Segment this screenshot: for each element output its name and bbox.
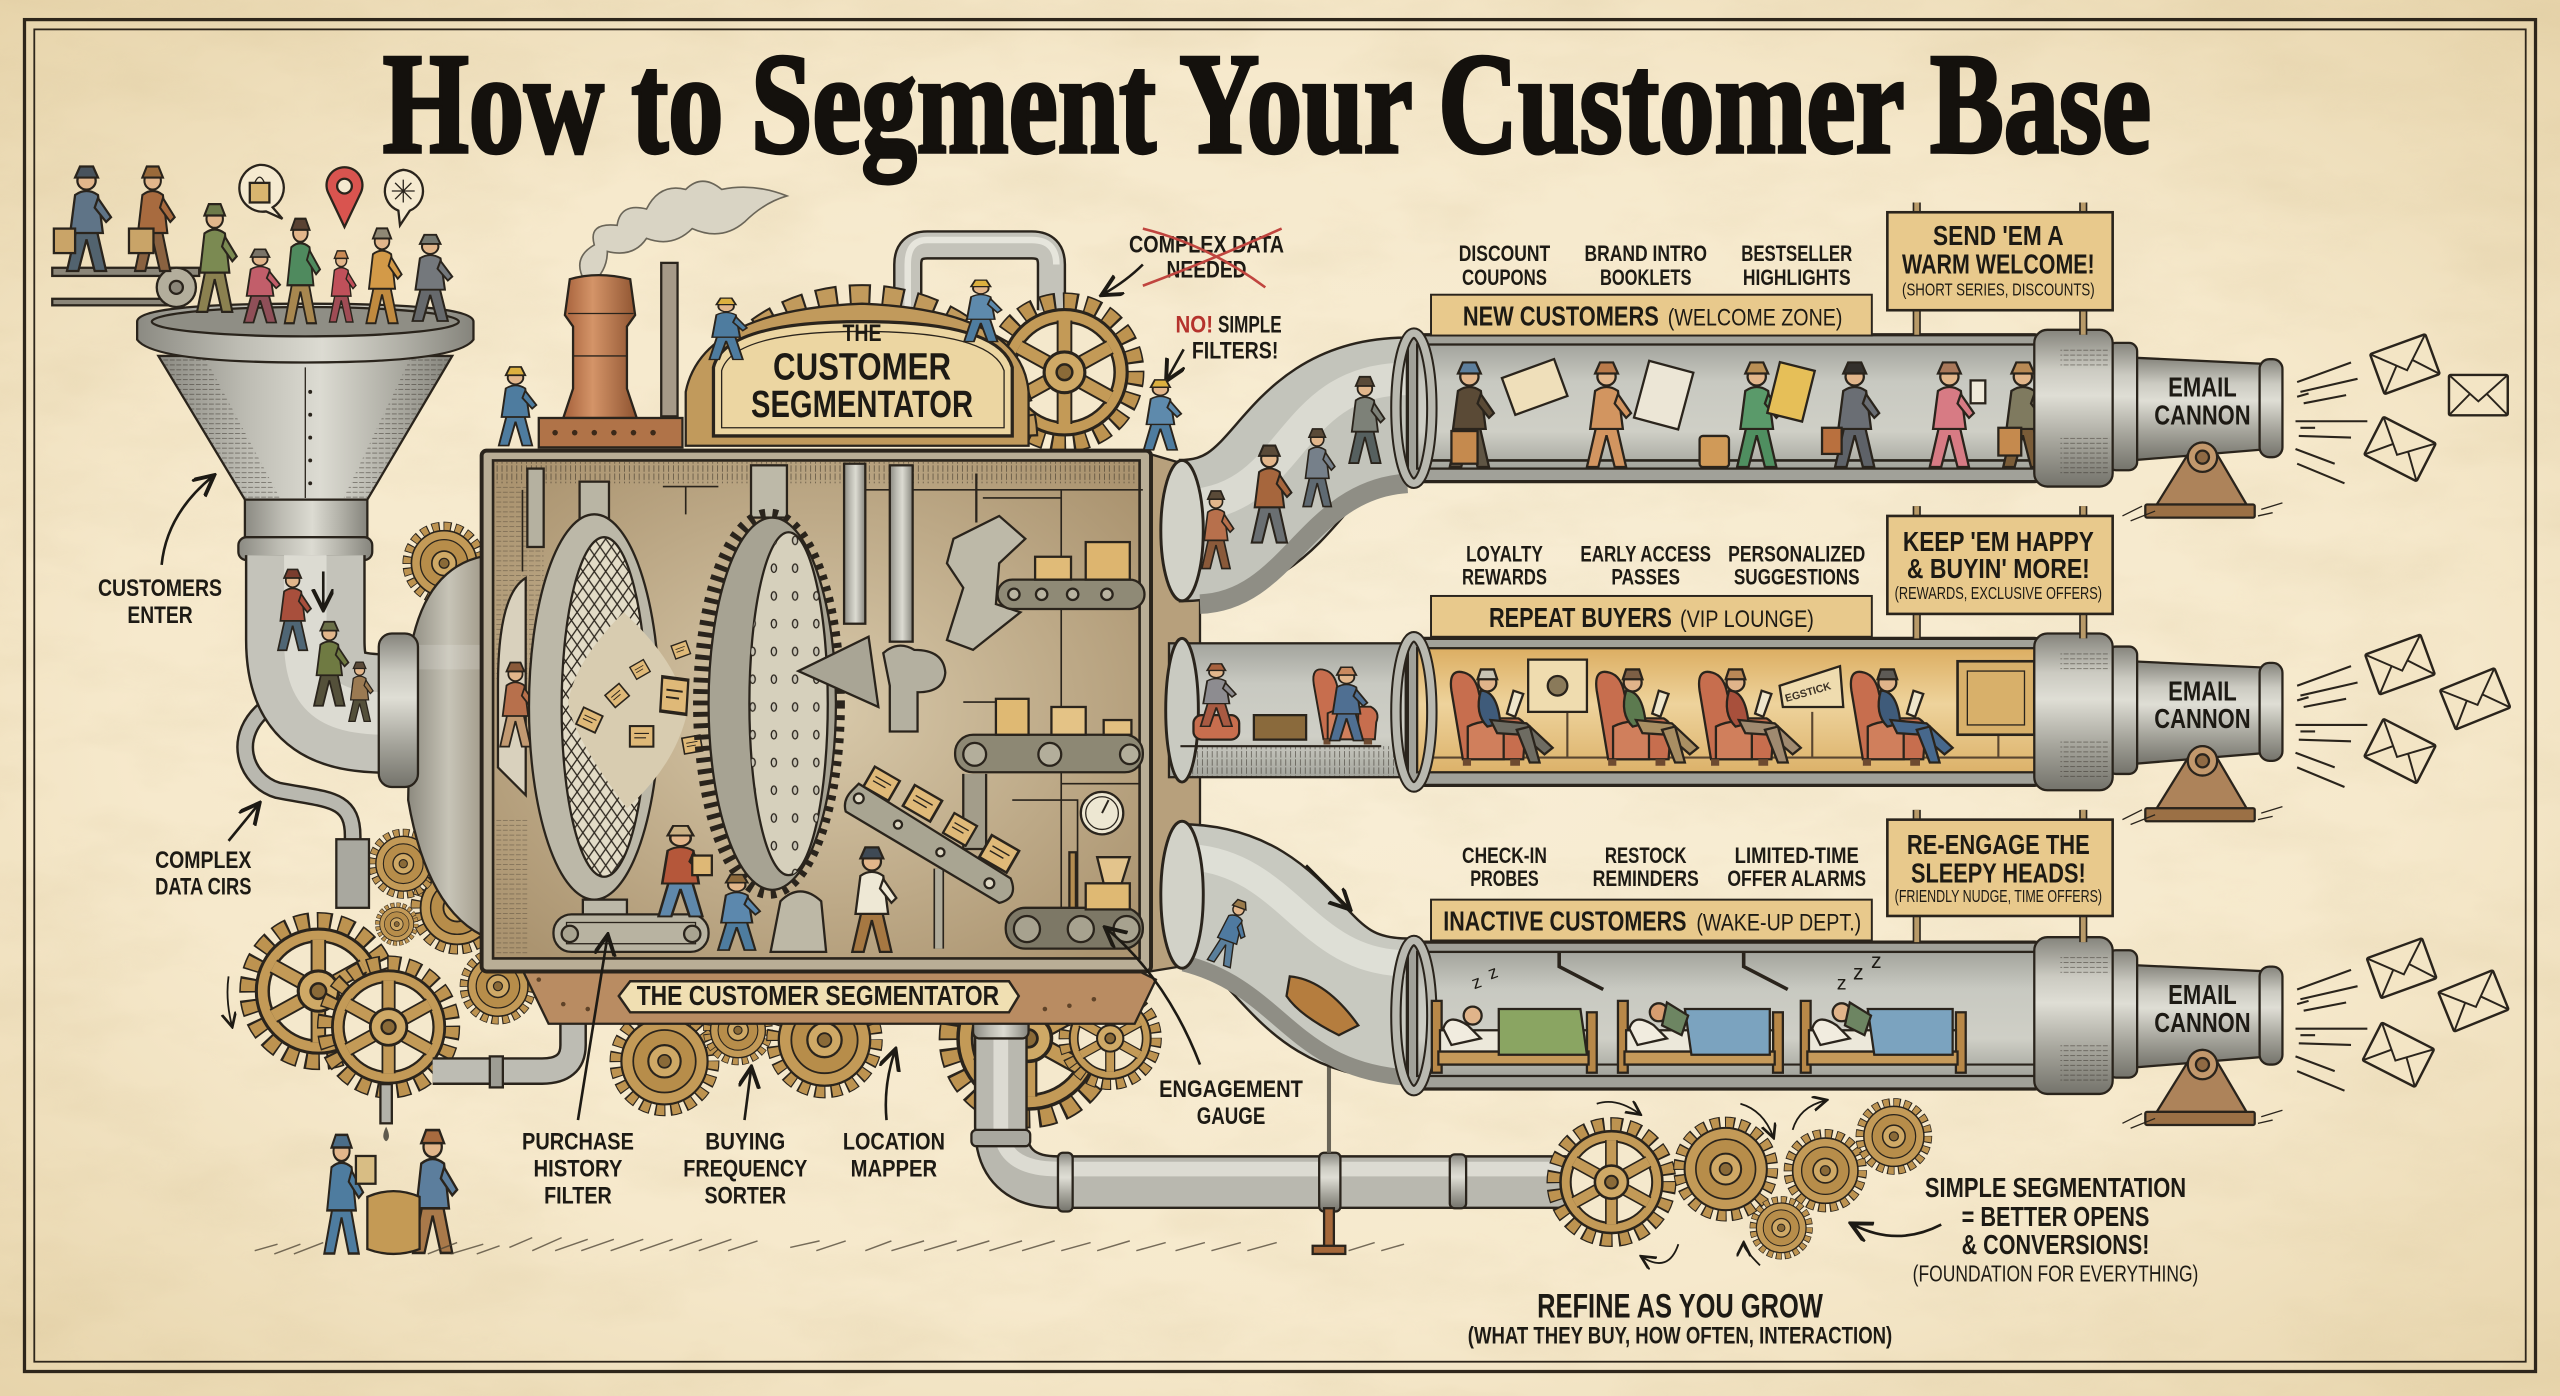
label: no simple filters: SIMPLE <box>1218 311 1282 338</box>
sign: repeat buyers: (REWARDS, EXCLUSIVE OFFERS) <box>1895 583 2102 603</box>
lower left gear train <box>250 839 450 1089</box>
sleeping zzz: z <box>1871 950 1882 973</box>
customers reading welcome material <box>1450 359 2047 467</box>
envelopes fired from cannons <box>2363 334 2510 1087</box>
data hose <box>245 705 353 888</box>
queue belt <box>52 268 199 307</box>
cooling pipe <box>433 1022 573 1087</box>
filter label: FILTER <box>544 1182 612 1209</box>
tube: new customers <box>1396 333 2047 483</box>
refine as you grow: REFINE AS YOU GROW <box>1537 1288 1823 1326</box>
refine as you grow: (WHAT THEY BUY, HOW OFTEN, INTERACTION) <box>1468 1323 1892 1350</box>
sleeping zzz <box>1469 950 1882 994</box>
cannon labels: EMAIL <box>2168 979 2237 1010</box>
label: complex data cirs: COMPLEX <box>155 847 252 874</box>
sign: repeat buyers: KEEP 'EM HAPPY <box>1903 526 2094 557</box>
cannon labels <box>2154 372 2251 1038</box>
tactics: new customers: BESTSELLER <box>1741 241 1852 266</box>
mapper label: MAPPER <box>851 1155 937 1182</box>
left arch with customer <box>498 578 535 795</box>
tactics: new customers: DISCOUNT <box>1459 241 1551 266</box>
return pipe <box>971 1016 1567 1211</box>
smoke plume <box>580 181 787 284</box>
tactics: inactive customers: OFFER ALARMS <box>1727 866 1866 891</box>
lower right conveyor <box>1006 852 1143 949</box>
tactics: repeat buyers: PERSONALIZED <box>1728 542 1865 567</box>
oil drip and workers <box>324 1084 457 1254</box>
mapper label <box>843 1051 945 1182</box>
top copper chimney <box>539 263 682 447</box>
gauge label: GAUGE <box>1197 1103 1265 1130</box>
banner: repeat buyers <box>1431 596 1872 637</box>
tactics: inactive customers: RESTOCK <box>1605 843 1687 868</box>
label: customers enter: CUSTOMERS <box>98 575 222 602</box>
tactics: inactive customers: CHECK-IN <box>1462 843 1547 868</box>
icon: shopping bag bubble <box>239 165 284 219</box>
sign text <box>751 320 973 425</box>
cannon labels: EMAIL <box>2168 372 2237 403</box>
sleeping zzz: z <box>1837 972 1847 994</box>
cannon labels: CANNON <box>2154 400 2251 431</box>
under-machine gears <box>617 961 1155 1116</box>
banner: new customers: NEW CUSTOMERS <box>1463 301 1659 332</box>
sleeping zzz: z <box>1469 971 1484 993</box>
workers on the machine <box>499 280 1181 450</box>
sign: inactive customers: SLEEPY HEADS! <box>1911 857 2086 889</box>
banner: repeat buyers: REPEAT BUYERS <box>1489 602 1672 633</box>
tactics: repeat buyers <box>1462 542 1865 590</box>
machine side wall <box>1149 454 1200 971</box>
tactics: repeat buyers: SUGGESTIONS <box>1734 565 1860 590</box>
cannon labels: CANNON <box>2154 1007 2251 1038</box>
label: complex data cirs <box>155 805 258 901</box>
sorter label: BUYING <box>705 1128 785 1155</box>
sign: repeat buyers <box>1887 506 2113 638</box>
sign text: SEGMENTATOR <box>751 383 973 425</box>
posters on stands <box>1528 660 2034 758</box>
callout: simple segmentation <box>1913 1172 2198 1287</box>
posters on stands: EGSTICK <box>1784 680 1833 705</box>
middle conveyor with boxes <box>955 699 1143 849</box>
vertical pipes <box>844 464 913 642</box>
banner: new customers <box>1431 295 1872 336</box>
buying frequency sorter wheel <box>700 465 838 891</box>
sorter label <box>683 1069 807 1209</box>
gauge label <box>1107 929 1303 1130</box>
armchairs with customers <box>1451 669 1953 766</box>
claw arm <box>947 473 1025 650</box>
banner: inactive customers <box>1431 900 1872 940</box>
banner: new customers: (WELCOME ZONE) <box>1668 305 1842 332</box>
tactics: inactive customers <box>1462 843 1866 891</box>
label: customers enter: ENTER <box>127 602 193 629</box>
tactics: new customers: COUPONS <box>1462 265 1547 290</box>
boiler drum <box>408 555 490 939</box>
tactics: new customers: HIGHLIGHTS <box>1743 265 1851 290</box>
tactics: new customers: BOOKLETS <box>1600 265 1691 290</box>
icon: spark bubble <box>385 170 423 225</box>
arrow to gears <box>1853 1225 1941 1236</box>
sign: new customers: WARM WELCOME! <box>1902 248 2095 279</box>
refine gears <box>1555 1103 1927 1255</box>
tube: inactive customers wake-up dept <box>1396 940 2044 1091</box>
large gear by sign <box>996 303 1133 441</box>
sign: new customers <box>1887 202 2113 335</box>
sorter label: SORTER <box>704 1182 786 1209</box>
tube: repeat buyers VIP lounge <box>1396 637 2044 787</box>
icon: location pin <box>327 167 362 227</box>
label: customers enter <box>98 477 222 629</box>
flying data scraps <box>576 641 703 754</box>
top pipe loop <box>908 240 1056 310</box>
sign text: THE <box>842 320 882 347</box>
elbow pipe to inactive customers <box>1161 821 1407 1078</box>
callout: simple segmentation: & CONVERSIONS! <box>1962 1229 2149 1260</box>
callout: simple segmentation: (FOUNDATION FOR EVERYTHING) <box>1913 1261 2198 1287</box>
sleeping zzz: z <box>1853 962 1864 985</box>
tactics: inactive customers: LIMITED-TIME <box>1735 843 1859 868</box>
sign: inactive customers: (FRIENDLY NUDGE, TIME OFFERS) <box>1895 886 2102 906</box>
filter label: PURCHASE <box>522 1128 634 1155</box>
filter base conveyor <box>553 914 709 952</box>
elbow pipe to new customers <box>1161 377 1407 604</box>
funnel <box>137 304 473 560</box>
sign: repeat buyers: & BUYIN' MORE! <box>1907 553 2090 584</box>
filter label: HISTORY <box>533 1155 622 1182</box>
engagement gauge <box>1081 792 1123 834</box>
tactics: repeat buyers: REWARDS <box>1462 565 1547 590</box>
pipe stand <box>1313 1065 1345 1254</box>
straight pipe to repeat buyers <box>1166 638 1406 782</box>
sign: inactive customers <box>1887 810 2113 942</box>
rear gears behind boiler <box>373 527 531 1019</box>
tactics: repeat buyers: EARLY ACCESS <box>1580 542 1711 567</box>
beds with sleeping customers <box>1432 1001 1966 1073</box>
label: complex data needed crossed out: COMPLEX DATA <box>1129 231 1284 258</box>
gear rotation arrows <box>227 976 1825 1265</box>
label: complex data cirs: DATA CIRS <box>155 874 251 901</box>
sorter label: FREQUENCY <box>683 1155 807 1182</box>
label: no simple filters <box>1167 311 1282 379</box>
upper conveyor with boxes <box>998 542 1144 609</box>
title gear-arch sign <box>686 297 1029 446</box>
sign: inactive customers: RE-ENGAGE THE <box>1907 829 2090 860</box>
cannon labels: CANNON <box>2154 703 2251 734</box>
nameplate text: THE CUSTOMER SEGMENTATOR <box>637 980 999 1011</box>
tactics: new customers: BRAND INTRO <box>1584 241 1707 266</box>
callout: simple segmentation: SIMPLE SEGMENTATION <box>1925 1172 2186 1203</box>
label: no simple filters: NO! <box>1176 311 1213 338</box>
banner: inactive customers: INACTIVE CUSTOMERS <box>1443 906 1687 937</box>
wake-up alarm arms <box>1559 952 1788 989</box>
tactics: inactive customers: REMINDERS <box>1593 866 1699 891</box>
machine cabinet <box>482 451 1151 971</box>
label: complex data needed crossed out: NEEDED <box>1167 257 1247 284</box>
sign: new customers: (SHORT SERIES, DISCOUNTS) <box>1902 280 2095 300</box>
banner: inactive customers: (WAKE-UP DEPT.) <box>1696 910 1861 937</box>
machine nameplate <box>619 980 1019 1012</box>
intake pipe with customers inside <box>278 555 418 787</box>
inclined conveyor with boxes <box>845 767 1019 949</box>
refine as you grow <box>1468 1288 1892 1350</box>
gauge label: ENGAGEMENT <box>1159 1076 1303 1103</box>
machine plinth <box>522 970 1156 1024</box>
sign: new customers: SEND 'EM A <box>1933 220 2064 251</box>
tactics: inactive customers: PROBES <box>1470 866 1539 891</box>
tactics: repeat buyers: PASSES <box>1611 565 1680 590</box>
label: no simple filters: FILTERS! <box>1192 337 1278 364</box>
label: complex data needed crossed out <box>1104 229 1284 294</box>
ground hatching <box>255 1238 1404 1254</box>
mapper label: LOCATION <box>843 1128 945 1155</box>
customers in queue <box>54 166 452 323</box>
workers inside machine <box>659 826 896 952</box>
sorter funnel and nozzle <box>798 637 945 731</box>
cannon labels: EMAIL <box>2168 675 2237 706</box>
purchase history filter wheel <box>529 482 686 919</box>
sleeping zzz: z <box>1485 962 1500 983</box>
tactics: new customers <box>1459 241 1852 290</box>
sign text: CUSTOMER <box>773 346 951 388</box>
tactics: repeat buyers: LOYALTY <box>1466 542 1543 567</box>
filter label <box>522 937 634 1209</box>
email cannons <box>2034 330 2367 1128</box>
callout: simple segmentation: = BETTER OPENS <box>1962 1201 2149 1232</box>
banner: repeat buyers: (VIP LOUNGE) <box>1680 606 1814 633</box>
